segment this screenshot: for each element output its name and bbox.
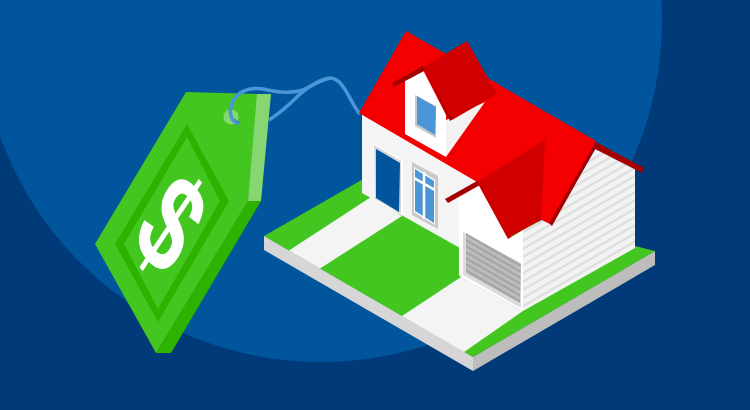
tag light edge — [248, 94, 271, 201]
front wall — [362, 114, 480, 260]
tag hole — [224, 110, 238, 124]
front window — [412, 162, 438, 229]
siding wall — [523, 148, 635, 311]
garage door — [463, 232, 521, 308]
dormer front — [405, 70, 446, 157]
gable roof — [445, 140, 545, 239]
background circle — [0, 0, 662, 362]
platform — [264, 178, 655, 371]
walkway — [289, 197, 402, 268]
rear roof trim — [549, 142, 644, 226]
dormer trim — [392, 66, 426, 87]
tag face — [95, 92, 258, 353]
tag inner diamond — [115, 124, 229, 322]
tag side — [156, 201, 261, 353]
dormer side — [446, 102, 485, 157]
garage front — [459, 182, 523, 311]
front door — [373, 143, 403, 216]
string: front loop — [230, 78, 330, 124]
main roof — [359, 31, 596, 225]
dollar sign: $ — [113, 143, 229, 305]
string: back strand — [269, 78, 360, 120]
house — [359, 31, 644, 311]
dormer roof — [423, 41, 497, 120]
dormer — [392, 41, 497, 157]
string inside hole — [234, 119, 239, 122]
dormer window — [415, 95, 436, 138]
price tag — [95, 92, 271, 353]
driveway — [402, 277, 523, 352]
